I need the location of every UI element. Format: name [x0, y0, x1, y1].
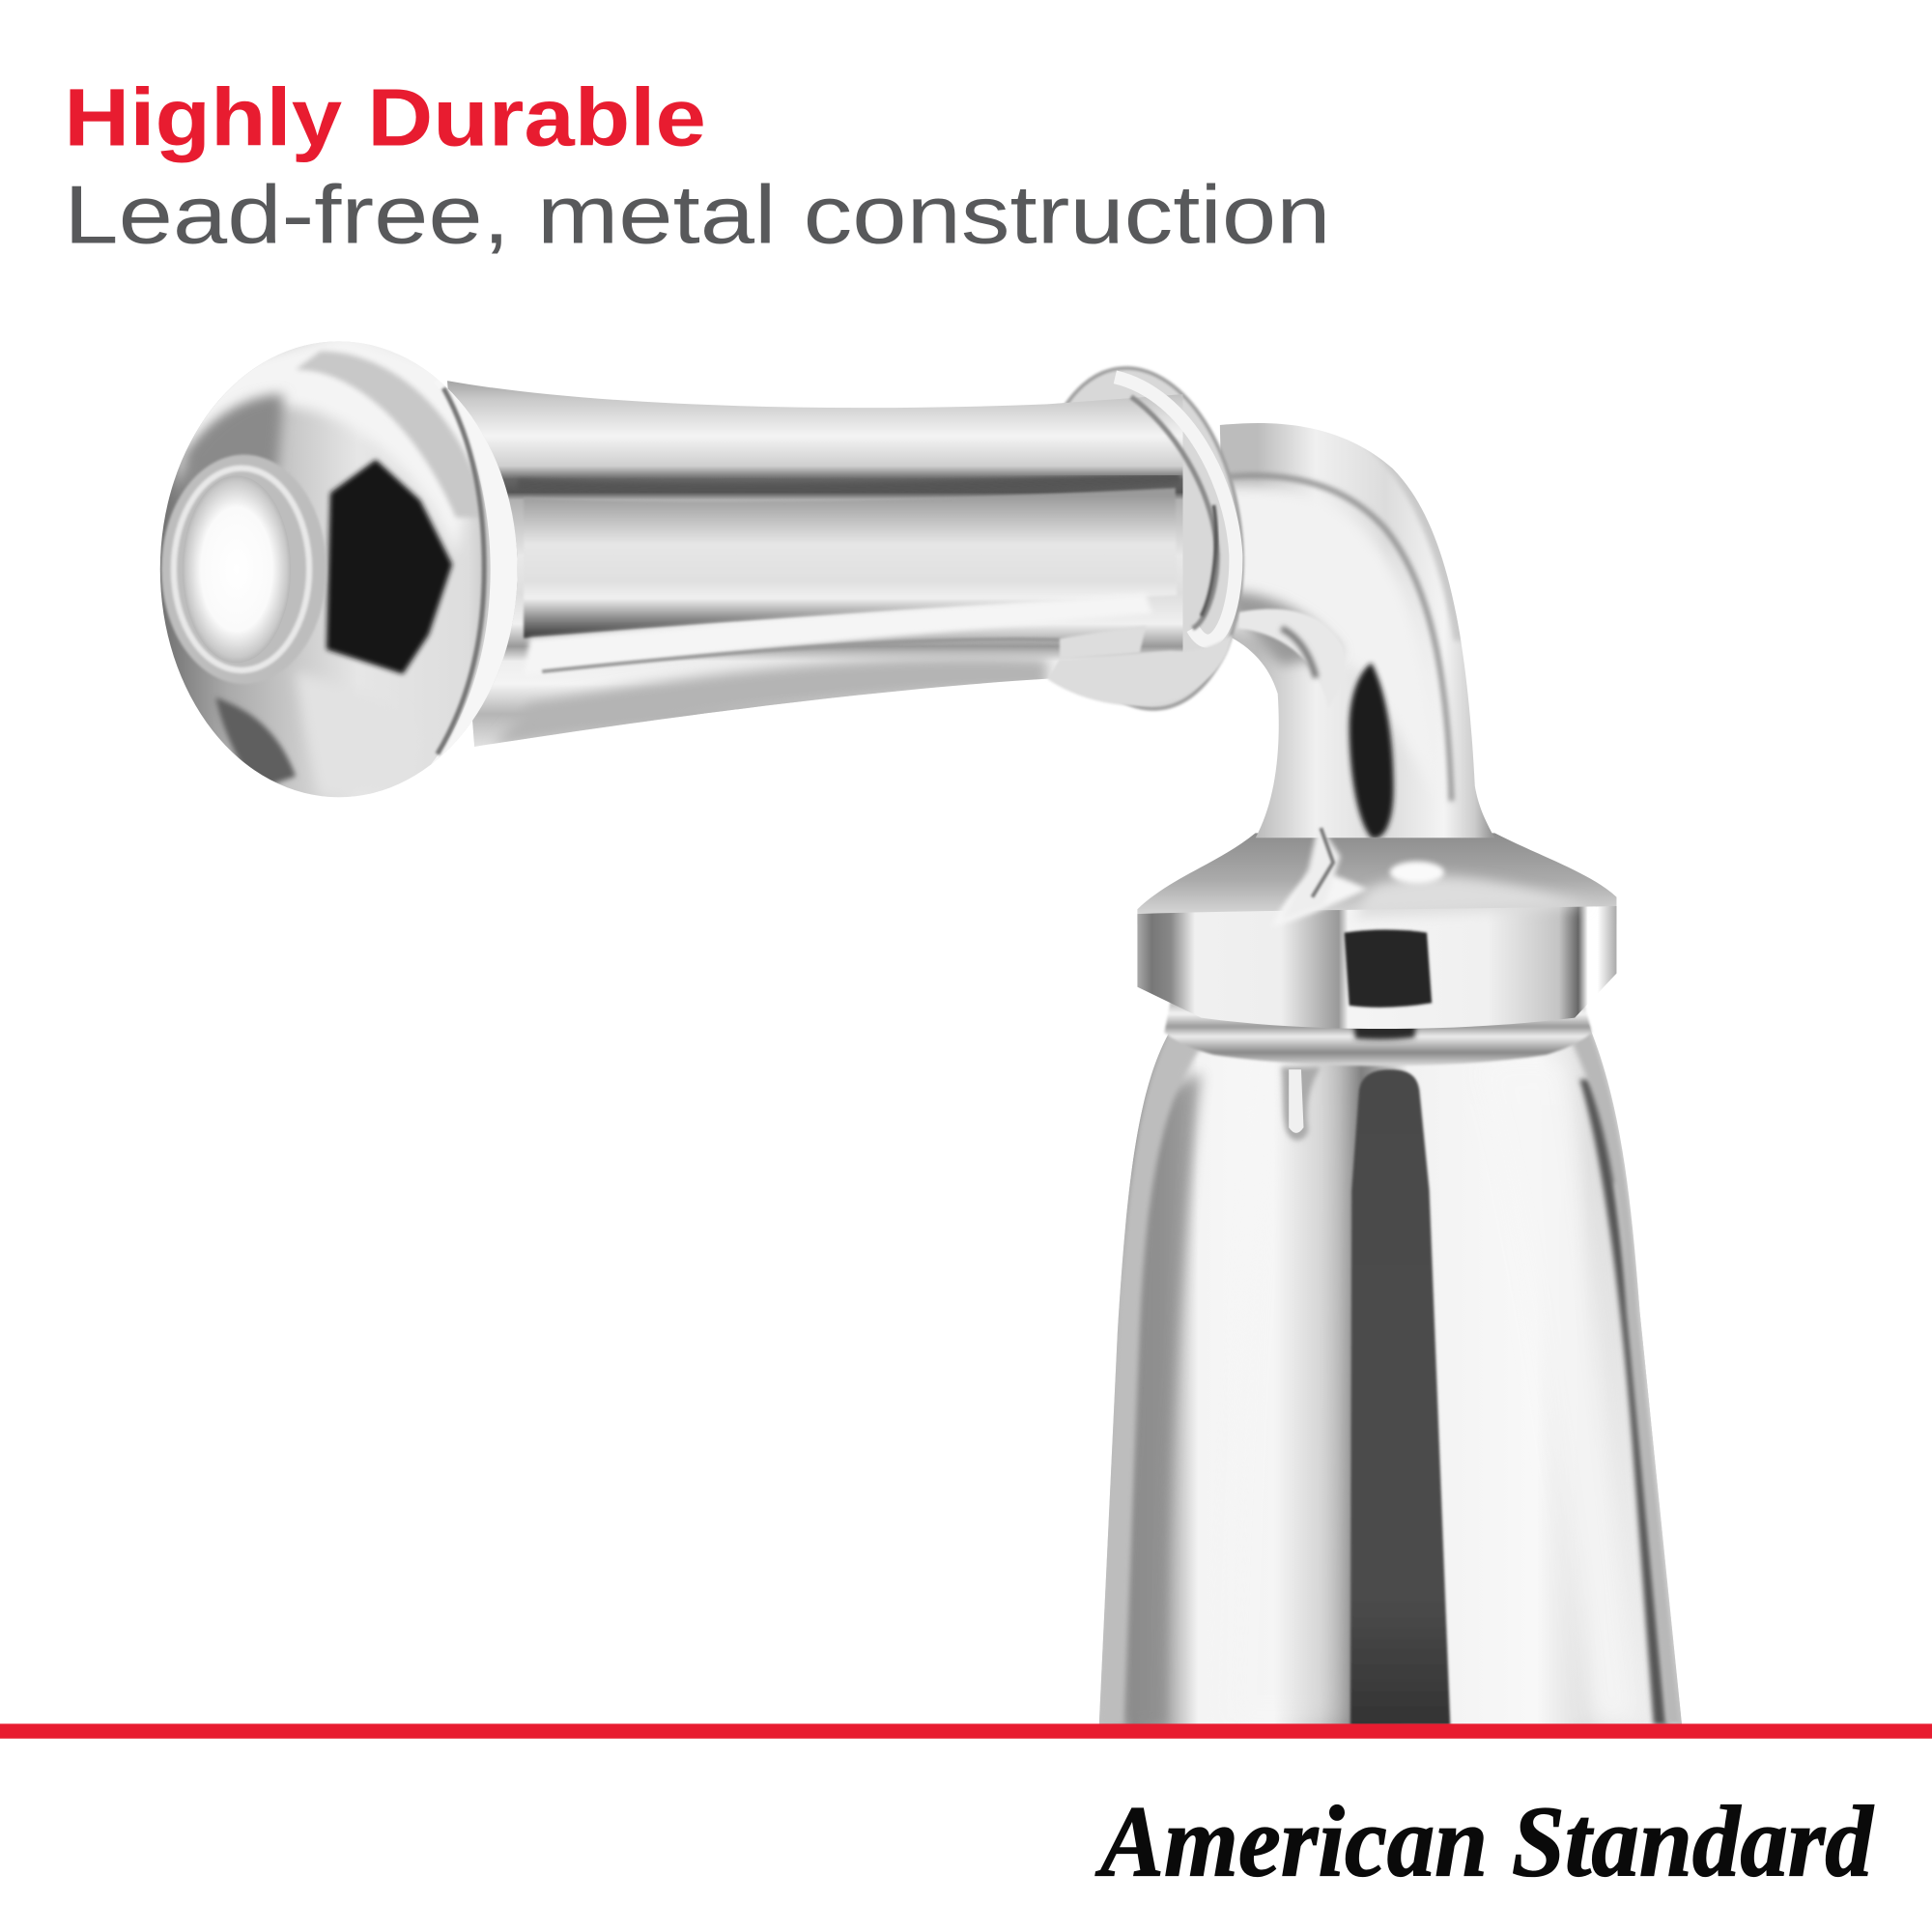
ring lower flange: [1047, 635, 1233, 706]
lever end flange: [154, 332, 524, 807]
red divider line: [0, 1723, 1932, 1739]
dark reflection band: [1350, 1069, 1450, 1725]
drip detail: [1282, 1067, 1321, 1140]
elbow neck detail: [1282, 823, 1341, 920]
faucet body: [1084, 1023, 1700, 1731]
ring highlights: [1115, 377, 1236, 641]
dark hexagon reflection: [327, 460, 452, 674]
heading: [64, 72, 1331, 261]
left outer band: [1099, 1030, 1202, 1725]
right edge dark line: [1579, 1079, 1673, 1725]
push button: [161, 455, 327, 684]
neck rings: [1164, 1001, 1592, 1065]
rim crescent: [431, 370, 518, 770]
product photo: chrome faucet handle: [154, 332, 1700, 1731]
right outer band: [1565, 1024, 1682, 1725]
collar and dome: [1137, 833, 1617, 1029]
dark slot in elbow: [1350, 663, 1394, 838]
logo: American Standard: American Standard: [1094, 1785, 1874, 1897]
title: highly durable: Highly Durable: [64, 72, 706, 163]
lever tube: [447, 381, 1182, 747]
elbow: [1213, 412, 1503, 844]
lower left dark patch: [215, 697, 296, 788]
ring: [1018, 356, 1261, 721]
tube center panel: [524, 488, 1177, 639]
subtitle: lead-free metal construction: Lead-free, metal construction: [64, 169, 1331, 261]
tube dark line: [518, 478, 1180, 490]
